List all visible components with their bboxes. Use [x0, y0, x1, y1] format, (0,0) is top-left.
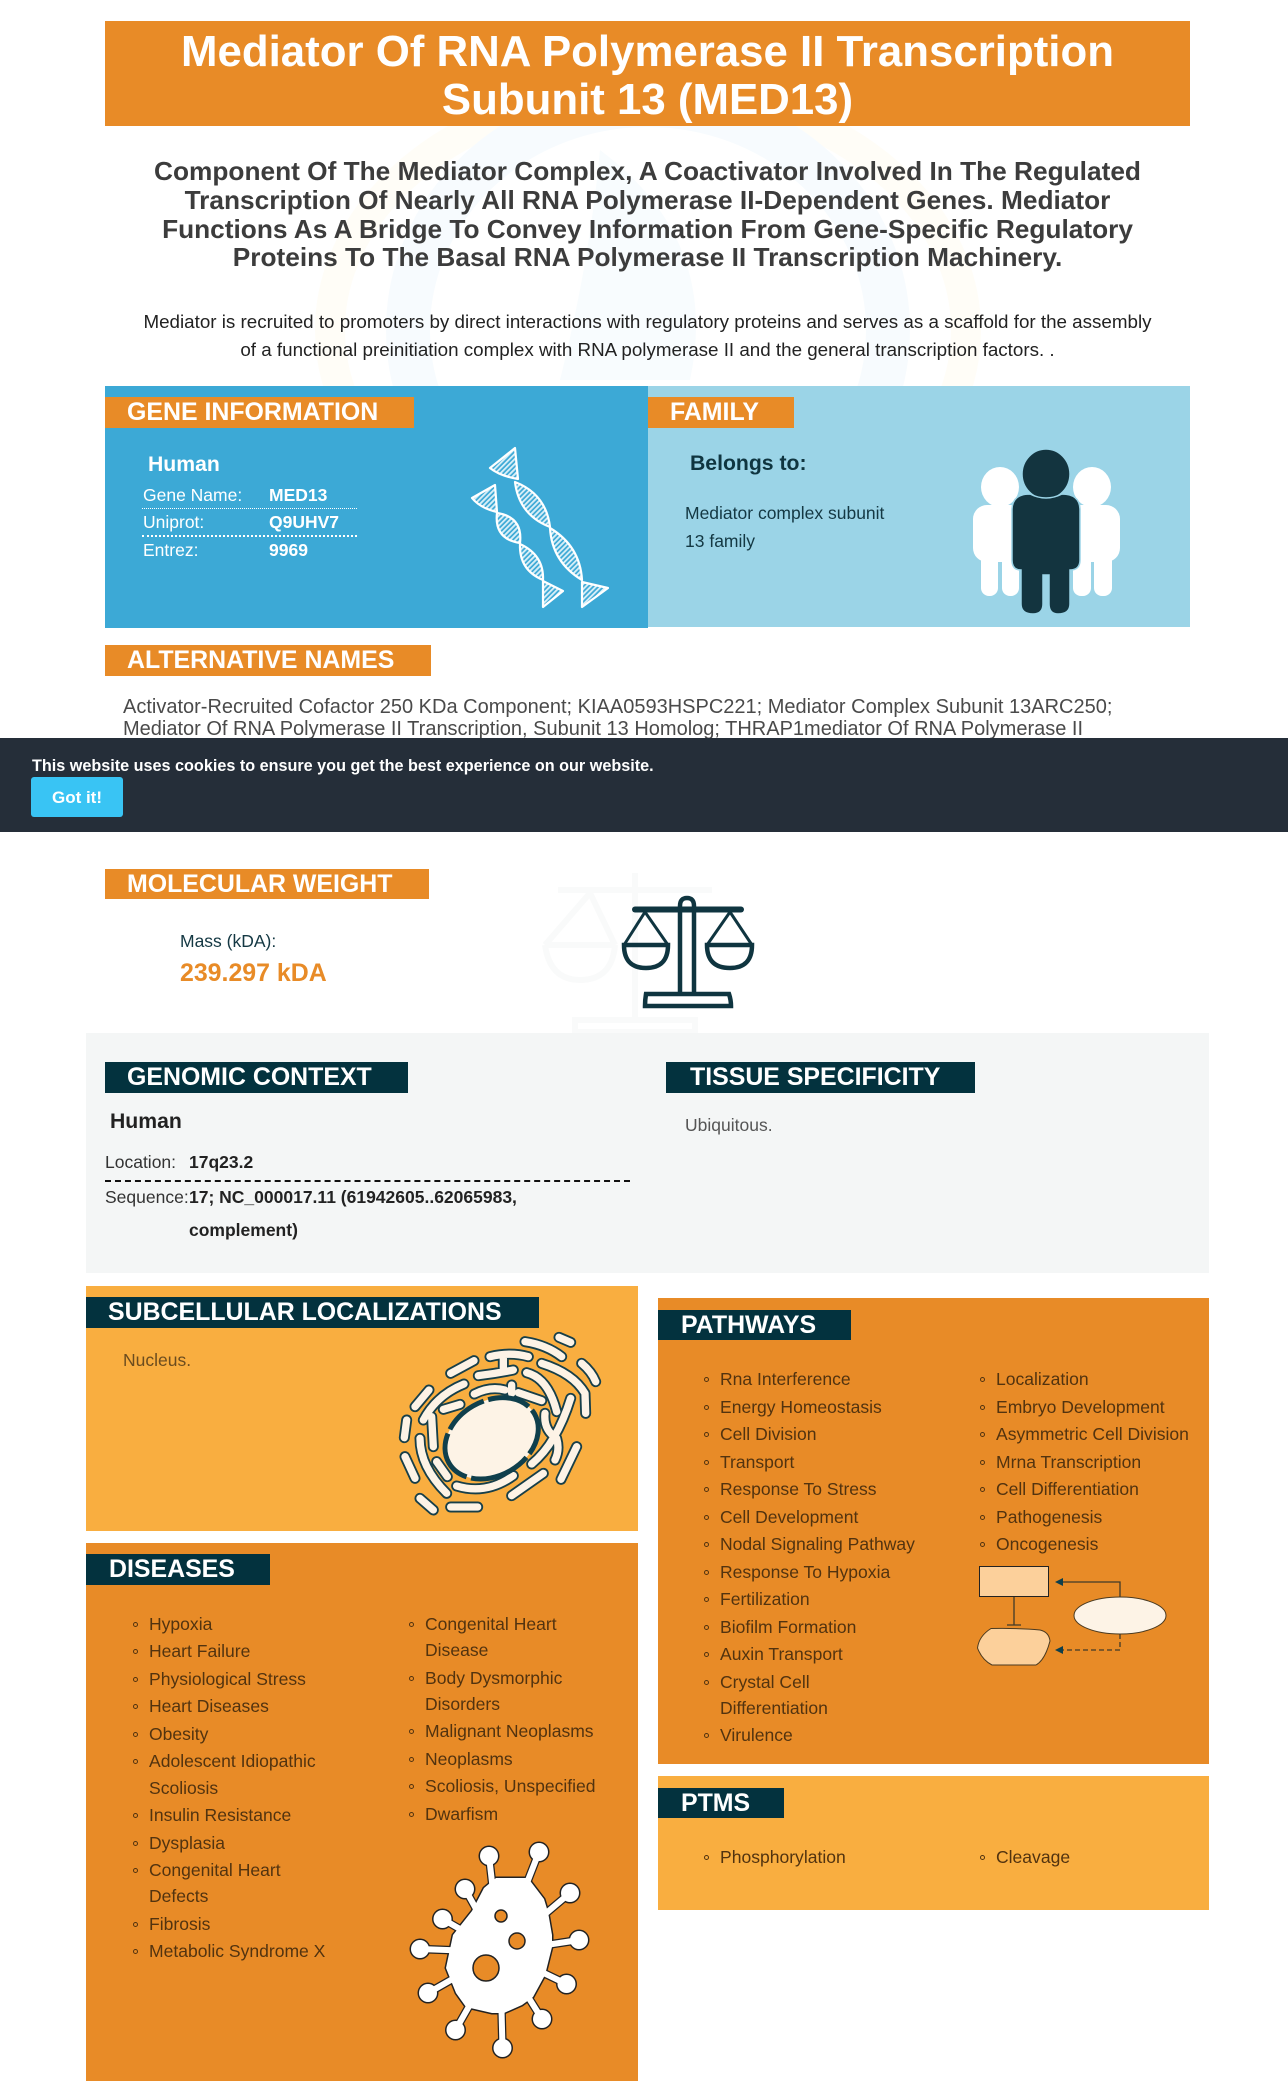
background watermark logo: [0, 0, 1288, 400]
family value: 13 family: [685, 531, 755, 551]
heading: diseases: DISEASES: [109, 1555, 235, 1583]
list: PTMs column 1: Phosphorylation: [720, 1847, 846, 1867]
mass value: 239.297 kDA: [180, 959, 327, 987]
list: pathways column 2: [980, 1369, 1189, 1554]
gene name row: [142, 485, 357, 509]
family value: [685, 503, 884, 551]
location row: 17q23.2: [189, 1152, 253, 1172]
button: got it: Got it!: [52, 788, 102, 807]
uniprot row: Q9UHV7: [269, 512, 339, 532]
list: pathways column 2: Oncogenesis: [996, 1534, 1098, 1554]
list: diseases column 1: Heart Failure: [149, 1641, 250, 1661]
list: diseases column 2: Disorders: [425, 1694, 500, 1714]
heading: genomic context: GENOMIC CONTEXT: [127, 1063, 372, 1091]
mass label: Mass (kDA):: [180, 931, 276, 951]
heading: pathways: PATHWAYS: [681, 1311, 816, 1339]
cookie banner: [0, 738, 1288, 832]
list: pathways column 1: [704, 1369, 915, 1745]
list: pathways column 2: Cell Differentiation: [996, 1479, 1139, 1499]
list: diseases column 2: [409, 1614, 596, 1824]
list: pathways column 1: Virulence: [720, 1725, 793, 1745]
list: pathways column 1: Rna Interference: [720, 1369, 851, 1389]
list: diseases column 1: Congenital Heart: [149, 1860, 281, 1880]
list: pathways column 1: Auxin Transport: [720, 1644, 843, 1664]
list: diseases column 1: Heart Diseases: [149, 1696, 269, 1716]
intro paragraph: [143, 311, 1152, 360]
list: diseases column 2: Body Dysmorphic: [425, 1668, 562, 1688]
heading: subcellular localizations: SUBCELLULAR LOCALIZATIONS: [108, 1298, 502, 1326]
alternative names text: Mediator Of RNA Polymerase II Transcription, Subunit 13 Homolog; THRAP1mediator Of RNA Polymerase II: [123, 718, 1083, 740]
title banner: Mediator Of RNA Polymerase II Transcription: [181, 27, 1114, 76]
intro paragraph: Mediator is recruited to promoters by direct interactions with regulatory proteins and serves as a scaffold for the assembly: [143, 311, 1152, 332]
list: pathways column 1: Differentiation: [720, 1698, 828, 1718]
list: diseases column 2: Neoplasms: [425, 1749, 513, 1769]
list: diseases column 1: [133, 1614, 325, 1961]
heading: family: FAMILY: [670, 398, 759, 426]
list: pathways column 1: Response To Hypoxia: [720, 1562, 890, 1582]
subtitle description: Proteins To The Basal RNA Polymerase II Transcription Machinery.: [233, 242, 1062, 272]
list: pathways column 2: Localization: [996, 1369, 1089, 1389]
list: diseases column 1: Physiological Stress: [149, 1669, 306, 1689]
list: diseases column 1: Obesity: [149, 1724, 208, 1744]
species label: Human: [148, 453, 220, 476]
list: diseases column 1: Defects: [149, 1886, 208, 1906]
family value: Mediator complex subunit: [685, 503, 884, 523]
heading: gene information: GENE INFORMATION: [127, 398, 378, 426]
gene name row: MED13: [269, 485, 327, 505]
sequence row: [105, 1187, 517, 1240]
button: got it: [31, 777, 123, 817]
list: diseases column 2: Disease: [425, 1640, 488, 1660]
list: pathways column 1: Response To Stress: [720, 1479, 877, 1499]
list: pathways column 2: Mrna Transcription: [996, 1452, 1141, 1472]
heading: molecular weight: MOLECULAR WEIGHT: [127, 870, 392, 898]
heading: alternative names: ALTERNATIVE NAMES: [127, 646, 394, 674]
panel: subcellular localizations: [86, 1286, 638, 1531]
panel: gene information: [105, 386, 648, 628]
list: pathways column 1: Biofilm Formation: [720, 1617, 856, 1637]
subtitle description: Transcription Of Nearly All RNA Polymerase II-Dependent Genes. Mediator: [185, 185, 1110, 215]
list: pathways column 1: Nodal Signaling Pathway: [720, 1534, 915, 1554]
icon: balance scale: [622, 896, 754, 1008]
sequence row: Sequence:: [105, 1187, 189, 1207]
list: pathways column 2: Pathogenesis: [996, 1507, 1102, 1527]
heading: PTMs: [658, 1788, 784, 1818]
heading: family: [648, 397, 794, 428]
belongs to label: Belongs to:: [690, 452, 807, 475]
localization text: Nucleus.: [123, 1350, 191, 1370]
icon: group of people: [973, 450, 1120, 614]
panel: genomic context and tissue specificity: [86, 1033, 1209, 1273]
list: diseases column 2: Dwarfism: [425, 1804, 498, 1824]
list: diseases column 1: Dysplasia: [149, 1833, 225, 1853]
list: pathways column 2: Asymmetric Cell Division: [996, 1424, 1189, 1444]
panel: PTMs: [658, 1776, 1209, 1910]
alternative names text: Activator-Recruited Cofactor 250 KDa Component; KIAA0593HSPC221; Mediator Complex Subunit 13ARC250;: [123, 696, 1112, 718]
icon: pathway diagram: [977, 1566, 1166, 1666]
heading: tissue specificity: TISSUE SPECIFICITY: [690, 1063, 940, 1091]
list: diseases column 2: Congenital Heart: [425, 1614, 557, 1634]
uniprot row: Uniprot:: [143, 512, 204, 532]
icon: ghost scale watermark: [543, 873, 715, 1033]
list: diseases column 1: Fibrosis: [149, 1914, 210, 1934]
subtitle description: Component Of The Mediator Complex, A Coactivator Involved In The Regulated: [154, 156, 1141, 186]
list: pathways column 1: Transport: [720, 1452, 794, 1472]
list: pathways column 1: Cell Development: [720, 1507, 858, 1527]
list: pathways column 1: Cell Division: [720, 1424, 816, 1444]
panel: diseases: [86, 1543, 638, 2081]
sequence row: complement): [189, 1220, 298, 1240]
title banner: [105, 21, 1190, 126]
list: diseases column 1: Hypoxia: [149, 1614, 212, 1634]
list: diseases column 1: Insulin Resistance: [149, 1805, 291, 1825]
cookie message: This website uses cookies to ensure you get the best experience on our website.: [32, 757, 654, 775]
sequence row: 17; NC_000017.11 (61942605..62065983,: [189, 1187, 517, 1207]
heading: diseases: [86, 1554, 270, 1585]
list: pathways column 1: Crystal Cell: [720, 1672, 810, 1692]
species label: Human: [110, 1110, 182, 1133]
heading: pathways: [658, 1310, 851, 1340]
panel: pathways: [658, 1298, 1209, 1764]
list: PTMs column 2: Cleavage: [996, 1847, 1070, 1867]
list: pathways column 1: Energy Homeostasis: [720, 1397, 882, 1417]
list: diseases column 2: Scoliosis, Unspecified: [425, 1776, 596, 1796]
entrez row: [143, 540, 308, 560]
location row: Location:: [105, 1152, 176, 1172]
subtitle description: Functions As A Bridge To Convey Information From Gene-Specific Regulatory: [162, 214, 1133, 244]
entrez row: Entrez:: [143, 540, 198, 560]
icon: virus: [410, 1842, 590, 2058]
uniprot row: [142, 512, 357, 537]
list: pathways column 2: Embryo Development: [996, 1397, 1165, 1417]
alternative names text: [123, 696, 1112, 740]
list: diseases column 2: Malignant Neoplasms: [425, 1721, 594, 1741]
list: diseases column 1: Scoliosis: [149, 1778, 218, 1798]
icon: DNA helices: [470, 446, 610, 608]
subtitle description: [154, 156, 1141, 272]
title banner: Subunit 13 (MED13): [442, 75, 853, 124]
tissue specificity text: Ubiquitous.: [685, 1115, 773, 1135]
list: diseases column 1: Adolescent Idiopathic: [149, 1751, 316, 1771]
intro paragraph: of a functional preinitiation complex with RNA polymerase II and the general transcription factors. .: [240, 339, 1055, 360]
location row: [105, 1152, 630, 1182]
panel: family: [648, 386, 1190, 627]
list: pathways column 1: Fertilization: [720, 1589, 810, 1609]
heading: PTMs: PTMS: [681, 1789, 750, 1817]
list: diseases column 1: Metabolic Syndrome X: [149, 1941, 325, 1961]
entrez row: 9969: [269, 540, 308, 560]
gene name row: Gene Name:: [143, 485, 242, 505]
icon: nucleus and organelle membranes: [398, 1332, 602, 1516]
